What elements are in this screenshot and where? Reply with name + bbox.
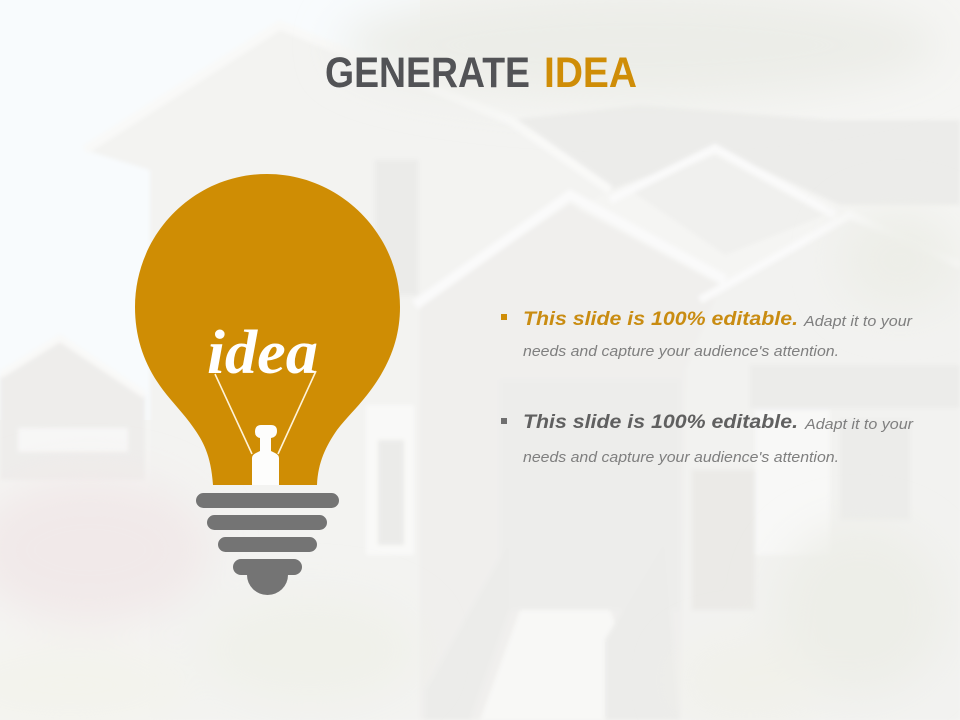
filament wires xyxy=(215,371,316,454)
bulb glass xyxy=(135,174,400,485)
bulb base xyxy=(196,493,339,595)
text block: second bullet: This slide is 100% editable. xyxy=(523,411,798,433)
text block: second bullet: Adapt it to your xyxy=(804,417,914,433)
bulb word: idea: idea xyxy=(207,319,318,387)
text block: first bullet: This slide is 100% editable. xyxy=(523,308,798,330)
text block: first bullet: Adapt it to your xyxy=(803,314,913,330)
text block: second bullet: needs and capture your audience's attention. xyxy=(523,450,839,466)
title: IDEA xyxy=(544,49,637,97)
text block: second bullet xyxy=(501,411,914,466)
text block: first bullet xyxy=(501,308,913,360)
text block: first bullet: needs and capture your audience's attention. xyxy=(523,344,839,360)
icon: idea light bulb xyxy=(135,174,400,595)
title: GENERATE xyxy=(325,49,530,97)
filament stem xyxy=(252,425,279,485)
